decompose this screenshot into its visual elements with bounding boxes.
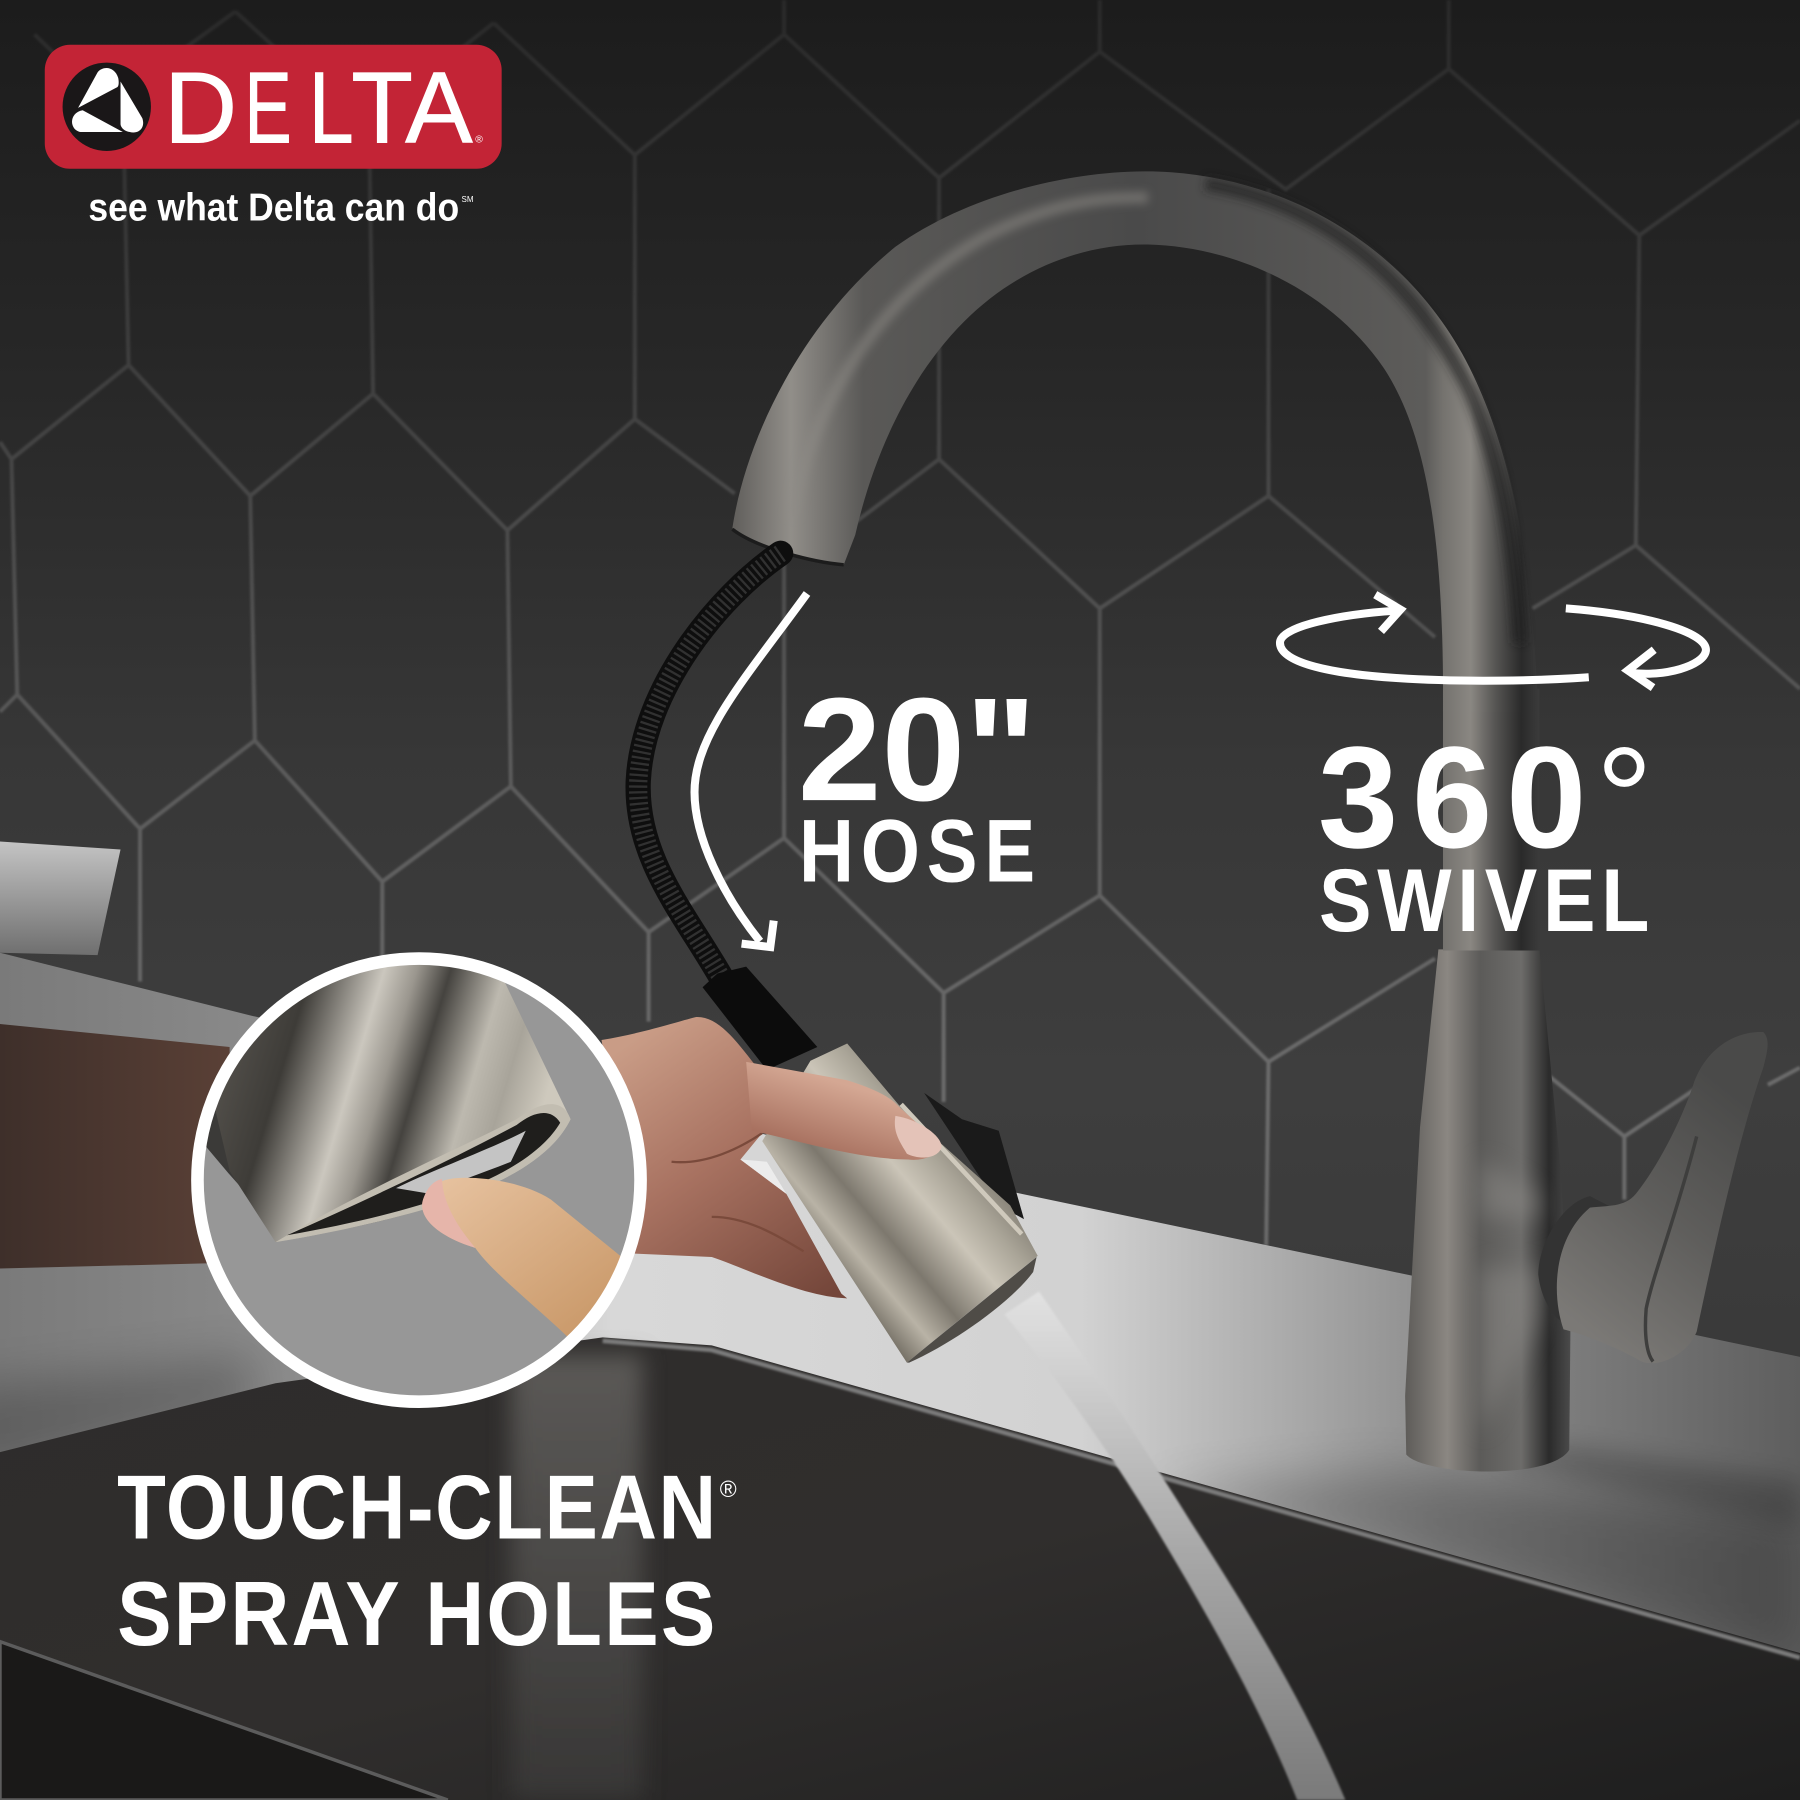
counter top (0, 953, 1800, 1676)
brand logo (45, 45, 502, 229)
finger (422, 1178, 620, 1336)
handle inner shading (1645, 1136, 1697, 1361)
counter visible between fingers (740, 1159, 786, 1194)
delta mark (63, 63, 151, 151)
basin on counter at left (0, 841, 121, 955)
sink reflection (511, 1355, 643, 1800)
spout mouth (732, 529, 844, 565)
sink lip at lower left (0, 1642, 448, 1800)
hose connector (703, 967, 817, 1070)
sprayer side button (206, 1110, 239, 1185)
pull-out hose (638, 553, 817, 1070)
spray head (762, 1043, 1038, 1363)
swivel callout (1318, 716, 1653, 950)
faucet lower body (1405, 949, 1570, 1472)
swivel callout: 360 (1318, 716, 1586, 878)
hose callout: 20" (798, 668, 1037, 832)
thumb nail (895, 1116, 941, 1157)
wordmark: L (309, 52, 354, 164)
registered mark: ® (475, 134, 483, 145)
touch-clean heading (117, 1458, 737, 1665)
tagline: see what Delta can do (88, 186, 459, 229)
wordmark: T (351, 52, 413, 164)
finger nail (422, 1179, 475, 1248)
service mark: SM (461, 195, 474, 204)
spout dark edge (1205, 184, 1520, 643)
spray face (287, 1113, 560, 1235)
spray rim (276, 1104, 571, 1242)
body highlight (1481, 1159, 1538, 1435)
spout highlight (792, 197, 1148, 517)
spray buttons (924, 1093, 1024, 1219)
swivel callout: ° (1596, 718, 1653, 878)
inset ring (197, 959, 641, 1402)
hand holding spray head (602, 1017, 907, 1298)
sprayer nozzle (214, 947, 571, 1242)
counter front shading (0, 1355, 1800, 1665)
handle lever (1557, 1032, 1768, 1363)
hose braid (638, 553, 781, 985)
hose callout (798, 668, 1037, 901)
swivel arrows (1280, 595, 1706, 688)
touch-clean heading: TOUCH-CLEAN (117, 1458, 716, 1558)
faucet (732, 171, 1768, 1472)
hose arrow (695, 593, 807, 947)
handle collar (1538, 1196, 1630, 1325)
wordmark: D (164, 52, 237, 164)
water stream (1004, 1291, 1345, 1800)
faucet base shadow (1492, 1444, 1800, 1527)
forearm (0, 1024, 230, 1268)
wordmark (164, 52, 473, 164)
spray outlet (907, 1257, 1037, 1363)
inset disc (197, 959, 641, 1402)
touch-clean heading: SPRAY HOLES (117, 1564, 715, 1665)
finger gap (672, 1133, 804, 1251)
wordmark: E (245, 52, 292, 164)
spout (732, 171, 1538, 712)
sink basin (0, 1337, 1800, 1800)
registered mark: ® (720, 1476, 737, 1502)
faucet neck (1443, 689, 1539, 951)
swivel callout: SWIVEL (1319, 850, 1649, 950)
hose callout: HOSE (799, 801, 1035, 901)
thumb over spray head (746, 1062, 939, 1160)
spray rim (901, 1104, 1022, 1234)
sink rim highlight (603, 1341, 1800, 1658)
wordmark: A (405, 52, 473, 164)
inset circle: touch-clean spray holes (197, 947, 643, 1402)
spray nubs (396, 1131, 526, 1194)
